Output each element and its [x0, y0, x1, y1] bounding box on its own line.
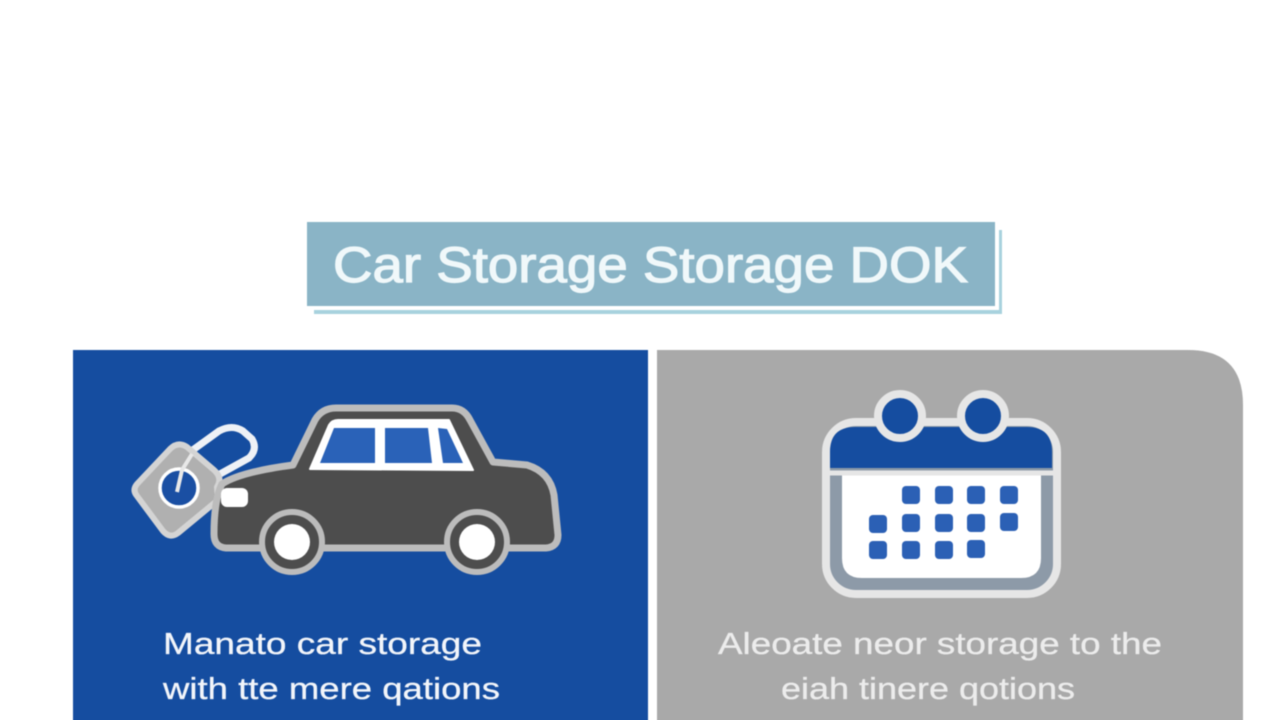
- text: calendar caption: eiah tinere qotions: [781, 671, 1075, 706]
- calendar days: [869, 486, 1018, 559]
- icon: padlock: [134, 428, 254, 536]
- rear wheel: [447, 512, 507, 572]
- title banner: [307, 222, 1002, 314]
- icon: calendar: [822, 394, 1060, 594]
- panel: calendar: [657, 350, 1243, 720]
- text: car storage caption: [162, 626, 500, 706]
- window panes: [320, 428, 463, 463]
- calendar rings: [878, 394, 1005, 438]
- text: calendar caption: [718, 626, 1162, 706]
- icon: car: [214, 408, 558, 572]
- headlight: [221, 488, 248, 507]
- front wheel: [262, 512, 322, 572]
- title text: Car Storage Storage DOK: [333, 237, 968, 293]
- window frame: [310, 420, 473, 470]
- panel: car storage: [73, 350, 648, 720]
- text: car storage caption: Manato car storage: [163, 626, 482, 661]
- text: calendar caption: Aleoate neor storage to the: [718, 626, 1162, 661]
- text: car storage caption: with tte mere qations: [162, 671, 500, 706]
